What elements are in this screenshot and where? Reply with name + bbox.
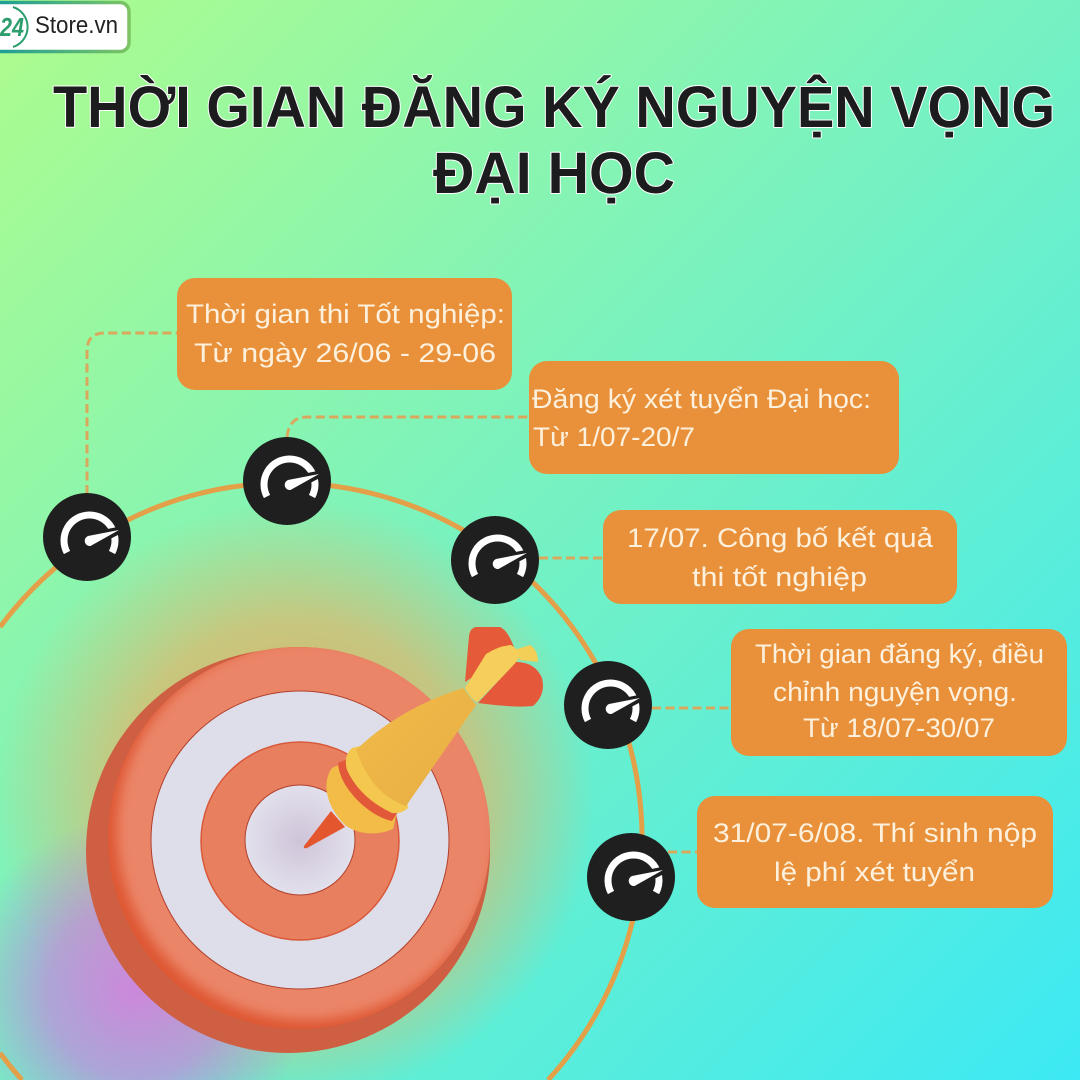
inner red ring xyxy=(201,742,399,940)
timeline item 2 xyxy=(243,361,899,525)
connector xyxy=(539,556,603,560)
dart flight front xyxy=(478,662,543,707)
connector xyxy=(287,417,529,437)
card text xyxy=(532,384,871,452)
card text: Từ ngày 26/06 - 29-06 xyxy=(194,338,496,368)
gauge icon xyxy=(43,493,131,581)
card text xyxy=(186,299,505,368)
dart tip xyxy=(304,811,345,848)
card text: Thời gian đăng ký, điều xyxy=(755,639,1044,669)
connector xyxy=(87,333,177,494)
timeline item 1 xyxy=(43,278,512,581)
dart bottom cap xyxy=(326,760,398,833)
dart body xyxy=(356,688,476,806)
card text: thi tốt nghiệp xyxy=(692,562,867,592)
logo: 24hStore: Store.vn xyxy=(35,12,118,39)
logo: 24hStore xyxy=(0,2,129,52)
dart flight yellow xyxy=(465,645,518,702)
title: THỜI GIAN ĐĂNG KÝ NGUYỆN VỌNG xyxy=(53,75,1055,140)
gauge icon xyxy=(587,833,675,921)
gauge icon xyxy=(451,516,539,604)
card text xyxy=(713,818,1037,887)
title xyxy=(53,75,1055,206)
board face xyxy=(100,640,500,1040)
glow behind target xyxy=(0,500,595,1080)
title: ĐẠI HỌC xyxy=(433,141,675,206)
dart flight yellow right xyxy=(514,645,538,662)
card xyxy=(697,796,1053,908)
card text: 31/07-6/08. Thí sinh nộp xyxy=(713,818,1037,848)
board side xyxy=(86,649,490,1053)
card text: chỉnh nguyện vọng. xyxy=(773,677,1017,707)
card xyxy=(603,510,957,604)
connector xyxy=(652,706,731,710)
card text: Đăng ký xét tuyển Đại học: xyxy=(532,384,871,414)
logo: 24hStore: 24 xyxy=(0,12,24,42)
timeline item 3 xyxy=(451,510,957,604)
timeline item 4 xyxy=(564,629,1067,756)
card xyxy=(177,278,512,390)
card text: lệ phí xét tuyển xyxy=(774,857,975,887)
card text xyxy=(627,523,934,592)
gauge icon xyxy=(564,661,652,749)
card text: Thời gian thi Tốt nghiệp: xyxy=(186,299,505,329)
card xyxy=(731,629,1067,756)
large orbit circle xyxy=(0,483,642,1080)
card text: Từ 1/07-20/7 xyxy=(533,422,695,452)
target board xyxy=(86,640,500,1053)
card xyxy=(529,361,899,474)
center xyxy=(245,785,355,895)
card text: 17/07. Công bố kết quả xyxy=(627,523,934,553)
timeline item 5 xyxy=(587,796,1053,921)
white ring xyxy=(151,691,449,989)
card text: Từ 18/07-30/07 xyxy=(803,713,995,743)
dart flight back xyxy=(465,627,515,682)
connector xyxy=(668,850,697,854)
gauge icon xyxy=(243,437,331,525)
dart red ring xyxy=(338,758,398,821)
card text xyxy=(755,639,1044,743)
dart collar xyxy=(346,745,408,813)
dart xyxy=(304,627,543,848)
